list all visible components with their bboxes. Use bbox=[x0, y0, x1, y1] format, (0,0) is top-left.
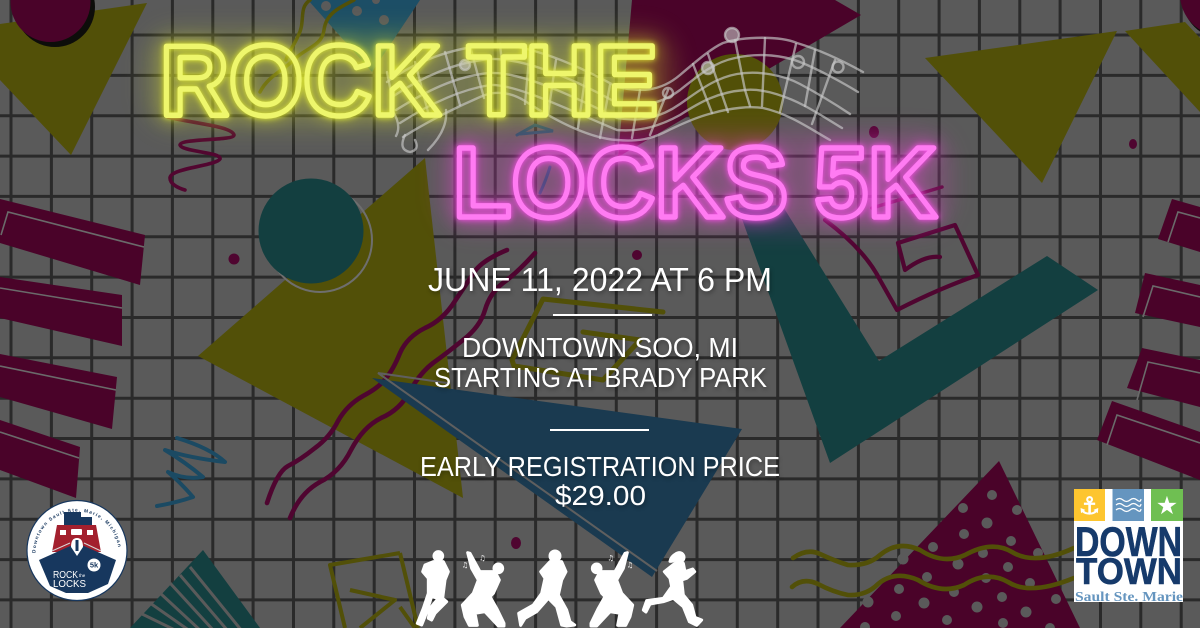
shape: olive center scribble bbox=[512, 299, 663, 380]
price text: EARLY REGISTRATION PRICE bbox=[420, 451, 780, 482]
music staff bbox=[387, 28, 863, 152]
location text: DOWNTOWN SOO, MI bbox=[462, 332, 738, 363]
shape: olive scribble at bottom bbox=[330, 553, 418, 628]
shape: corner maroon circle bbox=[1180, 0, 1200, 39]
shape: navy squiggle bbox=[157, 438, 225, 506]
badge ship bbox=[39, 512, 116, 593]
shape: maroon bars right bbox=[1097, 199, 1200, 480]
shape: maroon squiggle below R bbox=[168, 117, 234, 190]
icon: guitarist two: ♫ bbox=[607, 554, 614, 563]
title: neon ROCK THE: ROCK THE bbox=[160, 25, 658, 137]
price text bbox=[420, 451, 780, 511]
shape: navy triangle bbox=[372, 378, 742, 577]
icons: runners and guitarists silhouettes bbox=[417, 551, 702, 626]
badge arc text: Downtown Sault Ste. Marie, Michigan bbox=[32, 508, 120, 553]
location text: STARTING AT BRADY PARK bbox=[434, 362, 767, 393]
shape: olive squiggle behind title bbox=[260, 0, 354, 92]
shape: top-left olive triangle bbox=[0, 3, 147, 155]
shape: maroon waves bbox=[267, 250, 535, 518]
logo star tile: ★ bbox=[1156, 491, 1178, 520]
icon: runner centre bbox=[519, 551, 575, 626]
dots: scattered maroon dots bbox=[228, 126, 1137, 549]
badge ship: ROCK bbox=[53, 570, 78, 581]
shape: top maroon triangle bbox=[618, 0, 861, 157]
icon: runner one bbox=[417, 552, 448, 625]
glow: pink haze behind title bbox=[440, 132, 950, 230]
shape: striped teal triangle bbox=[130, 550, 260, 628]
badge ship: 5k bbox=[90, 560, 99, 570]
shape: teal circle with ring bbox=[258, 178, 372, 292]
shape: dotted maroon triangle bbox=[840, 461, 1080, 628]
icon: guitarist one: ♫ bbox=[462, 560, 468, 569]
shape: grey line on navy triangle bbox=[378, 373, 657, 571]
event date: JUNE 11, 2022 AT 6 PM bbox=[428, 261, 772, 298]
logo: Downtown Sault Ste. Marie bbox=[1074, 489, 1183, 605]
icon: guitarist one: ♫ bbox=[479, 554, 486, 563]
price text: $29.00 bbox=[555, 480, 646, 511]
shape: corner olive triangle bbox=[1125, 22, 1200, 112]
logo word TOWN: TOWN bbox=[1076, 551, 1182, 592]
shape: small navy marks behind title bbox=[517, 125, 553, 193]
shape: top-right olive triangle bbox=[925, 31, 1117, 183]
badge ship: LOCKS bbox=[53, 579, 86, 590]
location text bbox=[434, 332, 767, 393]
shape: top-left maroon circle bbox=[10, 0, 95, 47]
badge ship: the bbox=[79, 573, 86, 578]
icon: guitarist two: ♫ bbox=[627, 560, 633, 569]
logo tagline: Sault Ste. Marie bbox=[1075, 590, 1183, 605]
shape: maroon square scribble bbox=[825, 187, 978, 310]
shape: big olive triangle bbox=[198, 158, 463, 498]
logo: Rock the Locks badge bbox=[26, 500, 128, 601]
divider one bbox=[553, 314, 652, 316]
logo anchor tile: ⚓ bbox=[1079, 492, 1100, 520]
title: neon LOCKS 5K: LOCKS 5K bbox=[453, 127, 937, 239]
shape: olive circle bbox=[687, 54, 783, 150]
shape: olive waves bbox=[792, 546, 1074, 595]
glow: yellow haze behind title bbox=[146, 30, 674, 128]
logo water tile bbox=[1112, 489, 1144, 521]
shape: teal V bbox=[738, 205, 1098, 463]
shape: maroon bars left bbox=[0, 199, 145, 498]
icon: guitarist two bbox=[591, 553, 633, 626]
icon: runner woman bbox=[643, 553, 702, 625]
icon: guitarist one bbox=[462, 553, 504, 626]
divider two bbox=[550, 429, 649, 431]
shape: dotted navy triangle at top bbox=[308, 0, 420, 72]
